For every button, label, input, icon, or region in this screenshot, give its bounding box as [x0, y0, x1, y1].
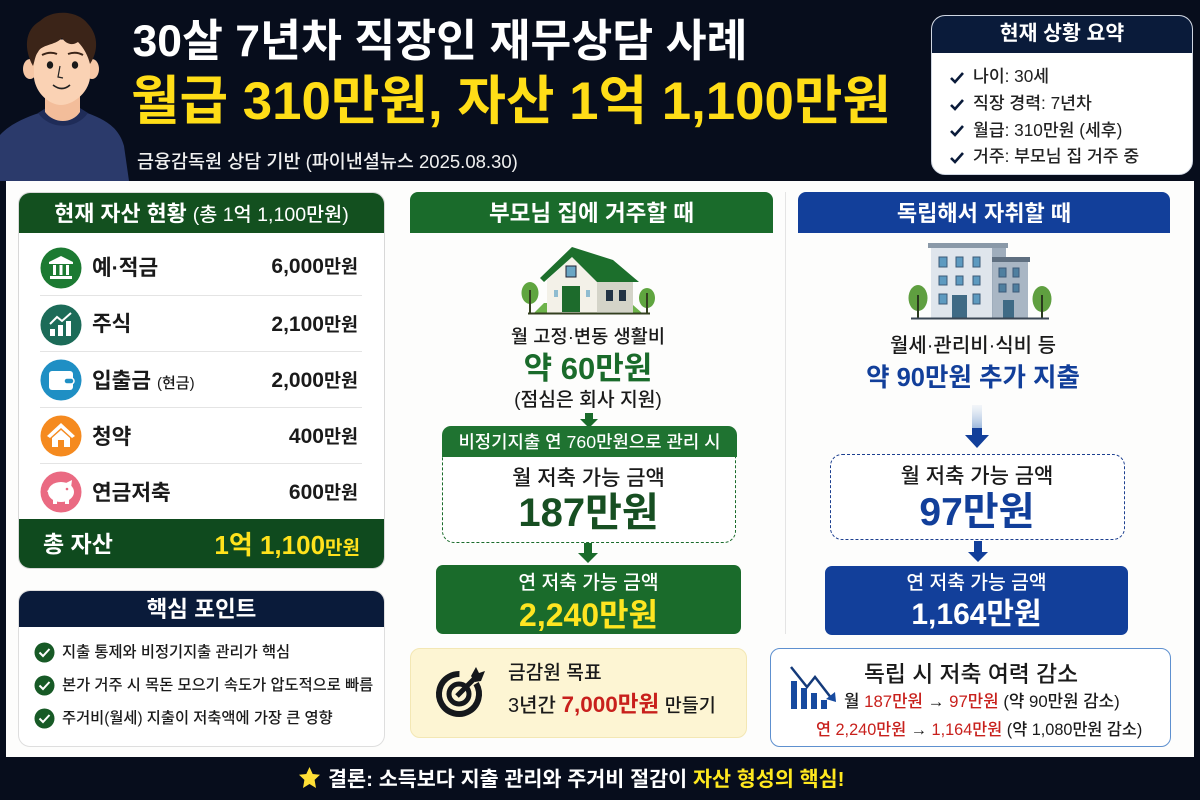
panel: reduced savings capacity: [770, 648, 1171, 747]
column divider: [785, 192, 786, 634]
key point 2: 본가 거주 시 목돈 모으기 속도가 압도적으로 빠름: [62, 677, 373, 694]
asset value: subscription: 400만원: [289, 425, 358, 448]
person illustration: [0, 12, 129, 181]
annual label: 연 저축 가능 금액: [518, 573, 659, 594]
irregular spending banner: 비정기지출 연 760만원으로 관리 시: [458, 432, 721, 452]
assets heading: [18, 192, 385, 233]
total assets band: [18, 519, 385, 569]
monthly label: 월 저축 가능 금액: [512, 467, 665, 490]
icon: apartment building with trees: [908, 243, 1052, 320]
asset value: deposits: 6,000만원: [271, 255, 358, 278]
goal label: 금감원 목표: [508, 663, 602, 684]
total assets band: 총 자산: [43, 531, 113, 557]
monthly reduction: 월 187만원 → 97만원 (약 90만원 감소): [844, 692, 1120, 711]
assets heading: 현재 자산 현황 (총 1억 1,100만원): [54, 201, 349, 226]
summary list: 직장 경력: 7년차: [973, 93, 1092, 113]
monthly savings box: home: [442, 450, 736, 543]
annual savings box: independent: [825, 566, 1128, 635]
asset row: subscription: 청약: [92, 425, 131, 449]
lunch note: (점심은 회사 지원): [514, 390, 662, 411]
asset row: cash: 입출금 (현금): [92, 369, 195, 393]
arrow with fading tail: [965, 405, 989, 448]
icon: wallet: [40, 360, 82, 400]
icon: stock chart: [40, 304, 82, 346]
conclusion: 결론: 소득보다 지출 관리와 주거비 절감이 자산 형성의 핵심!: [328, 768, 845, 791]
summary heading: [932, 16, 1192, 53]
key points heading: 핵심 포인트: [147, 597, 256, 622]
icon: star: [299, 767, 320, 788]
middle column heading: [410, 192, 773, 233]
annual reduction: 연 2,240만원 → 1,164만원 (약 1,080만원 감소): [816, 721, 1142, 739]
annual value: 2,240만원: [519, 597, 658, 633]
key point 1: 지출 통제와 비정기지출 관리가 핵심: [62, 644, 290, 661]
living cost value: 약 60만원: [524, 351, 652, 386]
asset row: deposits: 예·적금: [92, 256, 158, 280]
panel: FSS goal: [410, 648, 747, 738]
arrow: [968, 541, 988, 562]
annual label: 연 저축 가능 금액: [906, 573, 1047, 594]
annual savings box: home: [436, 565, 741, 634]
icon: piggy bank: [40, 472, 82, 512]
irregular spending banner: [442, 426, 737, 457]
rent label: 월세·관리비·식비 등: [890, 335, 1056, 357]
monthly value: 187만원: [518, 491, 659, 535]
source line: 금융감독원 상담 기반 (파이낸셜뉴스 2025.08.30): [137, 151, 518, 172]
summary list: 월급: 310만원 (세후): [973, 120, 1122, 140]
title: 30살 7년차 직장인 재무상담 사례: [132, 17, 747, 66]
key point 3: 주거비(월세) 지출이 저축액에 가장 큰 영향: [62, 710, 333, 727]
headline: 월급 310만원, 자산 1억 1,100만원: [131, 72, 891, 131]
icon: bank: [40, 248, 82, 288]
summary heading: 현재 상황 요약: [1000, 22, 1124, 45]
arrow: [580, 413, 598, 426]
panel: main white area: [6, 181, 1194, 757]
asset row: pension: 연금저축: [92, 481, 171, 505]
panel: current situation summary: [931, 15, 1193, 175]
asset row: stocks: 주식: [92, 312, 131, 336]
panel: current assets: [18, 192, 385, 569]
key points heading: [18, 590, 385, 627]
icon: house: [40, 416, 82, 456]
summary list: [950, 66, 1139, 166]
icon: target: [436, 667, 485, 717]
total assets band: 1억 1,100만원: [214, 530, 360, 560]
panel: key points: [18, 590, 385, 747]
summary list: 나이: 30세: [973, 66, 1049, 86]
monthly savings box: independent: [830, 454, 1125, 540]
asset value: stocks: 2,100만원: [271, 313, 358, 336]
summary list: 거주: 부모님 집 거주 중: [973, 146, 1139, 166]
middle column heading: 부모님 집에 거주할 때: [489, 201, 694, 226]
icon: house with trees: [522, 247, 655, 314]
monthly label: 월 저축 가능 금액: [901, 465, 1053, 488]
asset value: cash: 2,000만원: [271, 369, 358, 392]
living cost label: 월 고정·변동 생활비: [511, 326, 665, 347]
arrow: [578, 543, 598, 563]
reduction title: 독립 시 저축 여력 감소: [864, 661, 1078, 687]
right column heading: [798, 192, 1170, 233]
goal value: 3년간 7,000만원 만들기: [508, 692, 716, 717]
right column heading: 독립해서 자취할 때: [897, 201, 1071, 226]
annual value: 1,164만원: [911, 598, 1042, 631]
icon: declining bar chart: [790, 666, 836, 709]
extra spend value: 약 90만원 추가 지출: [866, 364, 1080, 392]
monthly value: 97만원: [919, 491, 1035, 534]
asset value: pension: 600만원: [289, 481, 358, 504]
